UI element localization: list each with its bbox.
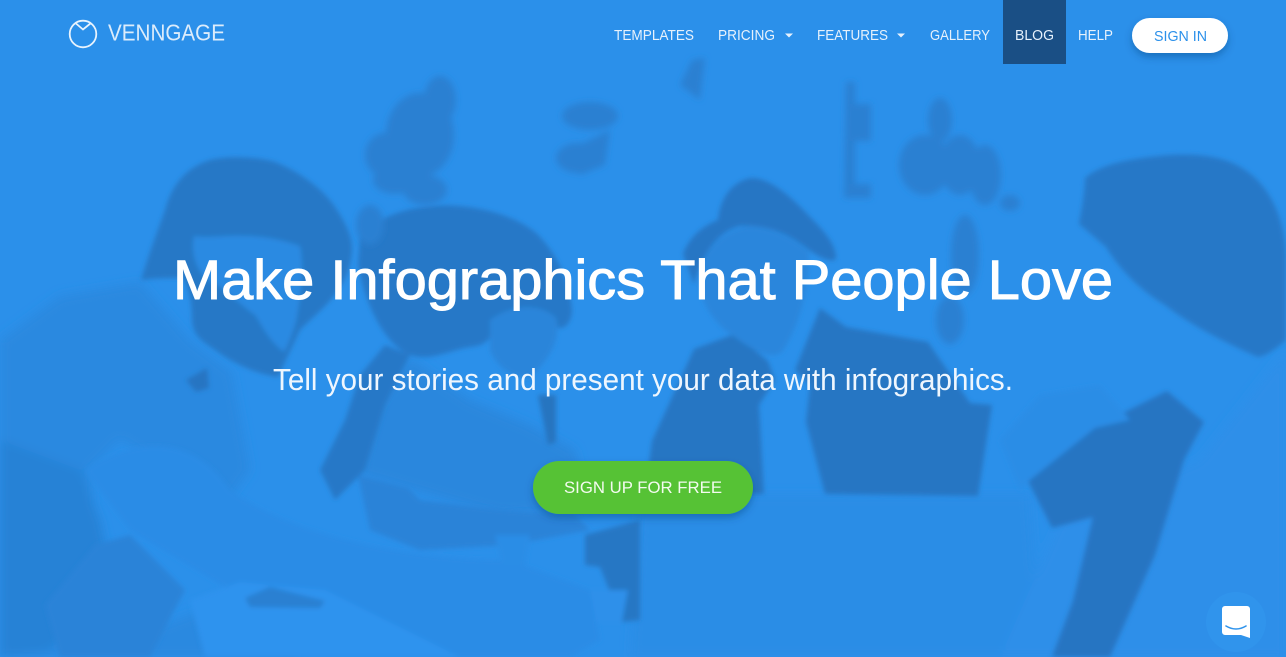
icon: features caret <box>897 34 905 38</box>
call to action button: SIGN UP FOR FREE <box>564 478 722 497</box>
main heading: Make Infographics That People Love <box>173 248 1113 311</box>
man centre jacket <box>645 334 775 494</box>
woman right hair <box>1079 155 1286 357</box>
man centre hat <box>683 178 836 285</box>
woman centre hair <box>358 205 572 357</box>
logo <box>70 20 225 47</box>
logo wordmark: VENNGAGE <box>108 20 225 46</box>
call to action button <box>533 461 753 514</box>
man face <box>193 236 302 352</box>
chat widget <box>1206 592 1266 652</box>
nav item: templates: TEMPLATES <box>614 27 694 44</box>
man left arm <box>85 446 600 657</box>
icon: chat bubble <box>1222 606 1250 638</box>
navigation menu <box>614 27 1113 44</box>
nav item: help: HELP <box>1078 27 1113 44</box>
woman centre forearm <box>358 475 590 550</box>
icon: smile <box>1226 626 1246 629</box>
man hair, beard <box>141 157 352 377</box>
nav active tab: blog <box>1003 0 1066 64</box>
nav item: gallery: GALLERY <box>930 27 990 44</box>
sign in button <box>1132 18 1228 53</box>
plants <box>356 58 1020 344</box>
nav item: pricing: PRICING <box>718 27 775 44</box>
subheading: Tell your stories and present your data with infographics. <box>273 362 1013 397</box>
nav item: features: FEATURES <box>817 27 888 44</box>
nav item: blog: BLOG <box>1015 27 1054 44</box>
man centre face <box>700 227 809 355</box>
icon: clock <box>70 21 96 47</box>
sign in button: SIGN IN <box>1154 28 1207 45</box>
icon: pricing caret <box>785 34 793 38</box>
woman centre face <box>490 307 557 378</box>
